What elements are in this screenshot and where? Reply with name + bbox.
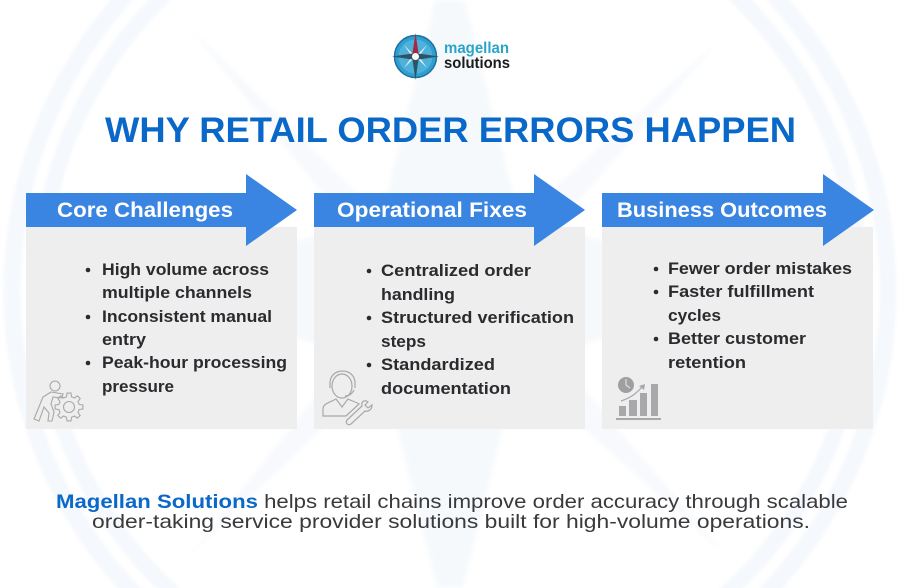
arrow header bbox=[314, 174, 585, 246]
bullet list: Faster fulfillment bbox=[668, 282, 814, 301]
icon: worker pushing gear bbox=[34, 381, 83, 421]
closing statement: Magellan Solutions helps retail chains improve order accuracy through scalable bbox=[56, 491, 848, 513]
bullet list: Standardized bbox=[381, 355, 495, 374]
closing statement bbox=[56, 491, 848, 533]
bullet list: Peak-hour processing bbox=[102, 353, 287, 372]
logo wordmark: solutions bbox=[444, 55, 510, 72]
panel: operational fixes bbox=[314, 174, 585, 429]
panel: business outcomes bbox=[602, 174, 874, 429]
icon: support agent with wrench bbox=[323, 371, 372, 425]
heading: Core Challenges bbox=[57, 199, 233, 222]
icon: growth chart with clock bbox=[616, 377, 661, 420]
bullet list bbox=[654, 259, 852, 372]
title: WHY RETAIL ORDER ERRORS HAPPEN bbox=[105, 111, 796, 150]
bullet list: Better customer bbox=[668, 329, 806, 348]
arrow header bbox=[602, 174, 874, 246]
bullet list: cycles bbox=[668, 306, 721, 325]
bullet list: documentation bbox=[381, 379, 511, 398]
bullet list: entry bbox=[102, 330, 147, 349]
bullet list: Inconsistent manual bbox=[102, 307, 272, 326]
bullet list: Centralized order bbox=[381, 261, 531, 280]
arrow header bbox=[26, 174, 297, 246]
logo wordmark bbox=[444, 40, 510, 72]
bullet list: High volume across bbox=[102, 260, 269, 279]
bullet list: retention bbox=[668, 353, 746, 372]
heading: Operational Fixes bbox=[337, 199, 527, 222]
logo wordmark: magellan bbox=[444, 40, 509, 57]
bullet list: steps bbox=[381, 332, 426, 351]
heading: Business Outcomes bbox=[617, 199, 827, 222]
bullet list bbox=[367, 261, 574, 398]
bullet list: multiple channels bbox=[102, 283, 252, 302]
logo bbox=[392, 33, 510, 80]
bullet list: handling bbox=[381, 285, 455, 304]
panel: core challenges bbox=[26, 174, 297, 429]
bullet list: Structured verification bbox=[381, 308, 574, 327]
icon: compass bbox=[392, 33, 439, 80]
closing statement: order-taking service provider solutions built for high-volume operations. bbox=[92, 511, 810, 533]
bullet list bbox=[86, 260, 287, 396]
bullet list: Fewer order mistakes bbox=[668, 259, 852, 278]
bullet list: pressure bbox=[102, 377, 174, 396]
